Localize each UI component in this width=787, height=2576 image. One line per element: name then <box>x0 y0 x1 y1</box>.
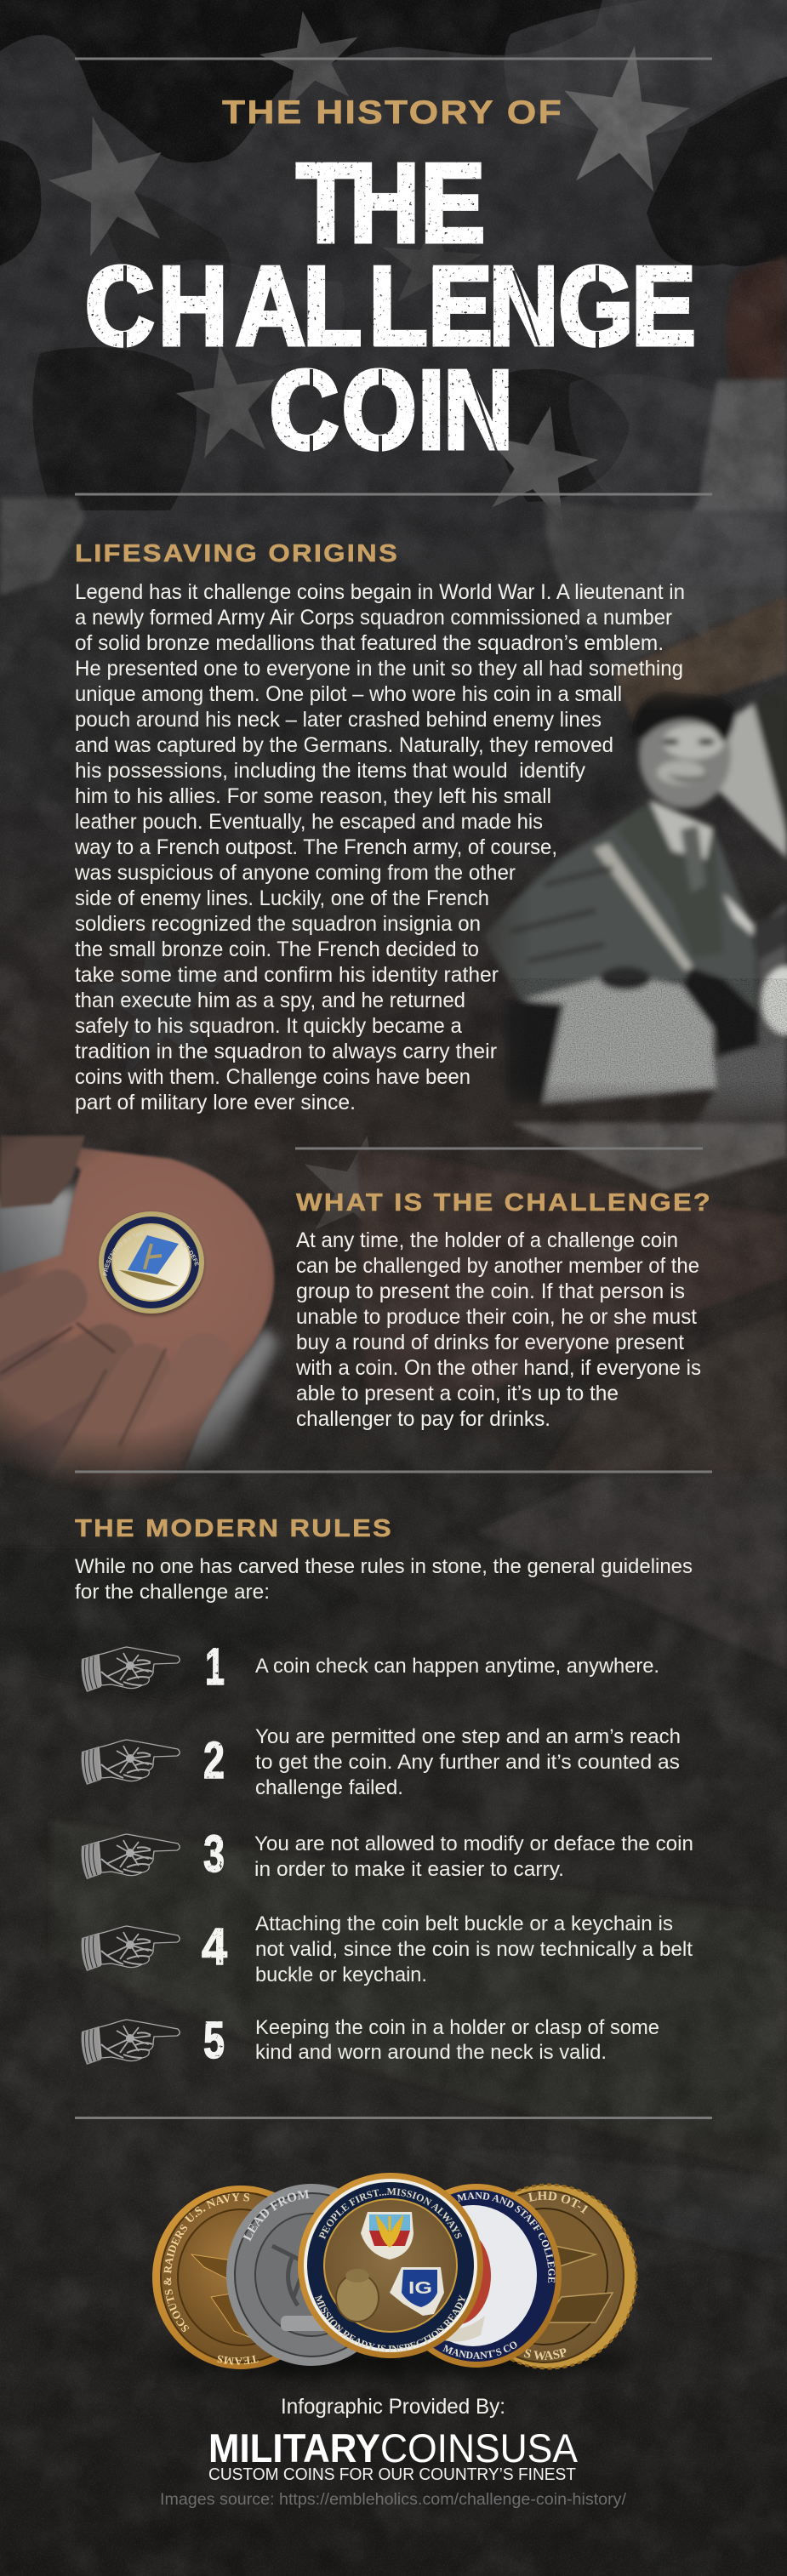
rule 2 text: challenge failed. <box>255 1776 403 1799</box>
text block: challenge explanation: buy a round of drinks for everyone present <box>296 1331 684 1354</box>
icon: pointing hand 5 <box>82 2020 180 2065</box>
number 2: 2 <box>203 1731 225 1789</box>
rule 5 text: Keeping the coin in a holder or clasp of some <box>255 2016 659 2039</box>
text block: challenge explanation: with a coin. On the other hand, if everyone is <box>295 1356 701 1380</box>
star shapes <box>49 11 707 1229</box>
coin group <box>152 2173 638 2380</box>
coin: people first mission always <box>298 2173 483 2358</box>
coin: command and staff college: MAND AND STAFF COLLEGE <box>456 2191 555 2283</box>
rule 3 text: in order to make it easier to carry. <box>254 1858 564 1881</box>
text block: origins story: a newly formed Army Air Corps squadron commissioned a number <box>75 606 672 630</box>
heading: lifesaving origins: LIFESAVING ORIGINS <box>75 540 399 567</box>
section: what is the challenge <box>295 1189 712 1431</box>
rule 5 text: kind and worn around the neck is valid. <box>255 2041 607 2064</box>
photo: soldier <box>483 681 787 1148</box>
divider: top <box>75 58 712 60</box>
rule 3 <box>82 1825 693 1883</box>
coin: navy scouts and raiders: TEAMS <box>217 2355 259 2365</box>
text block: origins story: unique among them. One pilot – who wore his coin in a small <box>75 682 622 706</box>
diagonal flag stripes <box>0 255 787 2263</box>
rule 5 <box>82 2011 659 2069</box>
icon: pointing hand 4 <box>82 1926 180 1971</box>
title: the challenge coin: CHALLENGE <box>85 244 696 369</box>
text block: origins story: side of enemy lines. Luckily, one of the French <box>75 886 489 910</box>
text block: challenge explanation: can be challenged by another member of the <box>296 1254 699 1278</box>
coin: navy scouts and raiders: SCOUTS & RAIDERS <box>163 2224 189 2332</box>
image source credit: Images source: https://embleholics.com/challenge-coin-history/ <box>160 2490 627 2509</box>
logo: military coins usa <box>208 2425 579 2484</box>
rule 2 text: You are permitted one step and an arm’s reach <box>255 1725 681 1748</box>
credit: infographic provided by: Infographic Provided By: <box>281 2395 505 2419</box>
rule 1 <box>82 1638 659 1695</box>
text block: origins story: than execute him as a spy, and he returned <box>75 989 465 1012</box>
text block: origins story: the small bronze coin. The French decided to <box>75 938 479 961</box>
text block: challenge explanation: able to present a coin, it’s up to the <box>296 1382 619 1405</box>
rule 1 text: A coin check can happen anytime, anywhere. <box>255 1655 659 1678</box>
coin in palm: PRESENTED BY THE SECRETARY OF DEFENSE <box>103 1230 199 1276</box>
text block: origins story: coins with them. Challenge coins have been <box>75 1065 470 1089</box>
text block: challenge explanation: group to present the coin. If that person is <box>296 1279 685 1303</box>
text block: origins story: and was captured by the Germans. Naturally, they removed <box>75 733 613 757</box>
rule 4 text: Attaching the coin belt buckle or a keychain is <box>255 1912 673 1935</box>
text block: origins story: way to a French outpost. The French army, of course, <box>74 835 557 859</box>
text block: rules intro: While no one has carved these rules in stone, the general guidelines <box>75 1555 693 1578</box>
icon: pointing hand 2 <box>82 1740 180 1785</box>
coin: USS Wasp bronze: LHD OT-1 <box>528 2191 588 2214</box>
text block: rules intro <box>75 1555 693 1604</box>
number 1: 1 <box>205 1638 225 1695</box>
coin: USS Wasp bronze: S WASP <box>524 2348 567 2360</box>
text block: origins story: was suspicious of anyone coming from the other <box>74 861 516 885</box>
coin: USS Wasp bronze <box>510 2183 638 2370</box>
text block: origins story: leather pouch. Eventually, he escaped and made his <box>75 810 543 834</box>
rule 3 text <box>254 1832 693 1881</box>
text block: challenge explanation <box>295 1228 701 1431</box>
logo: military coins usa: COINSUSA <box>380 2425 579 2471</box>
text block: origins story: soldiers recognized the squadron insignia on <box>75 912 481 936</box>
divider: above challenge section <box>295 1147 703 1150</box>
section: the modern rules <box>75 1515 693 2069</box>
text block: origins story: pouch around his neck – later crashed behind enemy lines <box>75 708 602 732</box>
shield: IG: IG <box>408 2279 432 2298</box>
number 3: 3 <box>203 1825 225 1883</box>
title: the challenge coin <box>87 162 694 452</box>
title: the challenge coin: COIN <box>269 348 513 473</box>
coin: command and staff college: MANDANT'S COIN <box>442 2341 517 2359</box>
rule 2 text <box>255 1725 681 1799</box>
coin: silver lead from the front <box>226 2184 396 2366</box>
coin: navy scouts and raiders <box>152 2186 281 2369</box>
rule 4 <box>82 1912 693 1986</box>
shield: air combat command <box>361 2212 413 2260</box>
text block: origins story: part of military lore ever since. <box>75 1091 356 1114</box>
text block: origins story: him to his allies. For some reason, they left his small <box>75 784 551 808</box>
divider: below title <box>75 493 712 495</box>
divider: above rules <box>75 1470 712 1473</box>
number 4: 4 <box>202 1918 227 1975</box>
heading: the modern rules: THE MODERN RULES <box>75 1515 393 1542</box>
section: lifesaving origins <box>74 540 685 1114</box>
photo: hand holding a challenge coin <box>0 1135 284 1487</box>
coin: command and staff college <box>427 2184 562 2368</box>
text block: origins story: his possessions, including the items that would identify <box>75 759 585 783</box>
text block: rules intro: for the challenge are: <box>75 1581 270 1604</box>
text block: origins story: safely to his squadron. It quickly became a <box>75 1014 462 1038</box>
rule 2 text: to get the coin. Any further and it’s counted as <box>255 1751 680 1774</box>
badge: bronze inspector <box>336 2269 379 2322</box>
icon: pointing hand 3 <box>82 1834 180 1879</box>
text block: challenge explanation: unable to produce their coin, he or she must <box>296 1305 697 1329</box>
text block: origins story: He presented one to everyone in the unit so they all had something <box>75 657 683 681</box>
title: the challenge coin: THE <box>296 141 485 266</box>
coin: people first mission always: PEOPLE FIRST...MISSION ALWAYS <box>318 2188 462 2239</box>
heading: what is the challenge: WHAT IS THE CHALLENGE? <box>296 1189 712 1217</box>
text block: origins story: take some time and confirm his identity rather <box>75 963 499 987</box>
rule 2 <box>82 1725 681 1799</box>
rule 4 text: not valid, since the coin is now technically a belt <box>255 1938 693 1961</box>
text block: origins story <box>74 580 685 1114</box>
shield: IG <box>390 2267 444 2316</box>
coin: people first mission always: MISSION READY IS INSPECTION READY <box>315 2294 466 2353</box>
text block: origins story: Legend has it challenge coins begain in World War I. A lieutenant in <box>75 580 685 604</box>
coin: navy scouts and raiders: U.S. NAVY S <box>184 2193 249 2222</box>
logo: military coins usa: MILITARY <box>208 2425 380 2471</box>
rule 4 text <box>255 1912 693 1986</box>
rule 4 text: buckle or keychain. <box>255 1963 427 1986</box>
text block: challenge explanation: At any time, the holder of a challenge coin <box>296 1228 678 1252</box>
title: the history of: THE HISTORY OF <box>222 94 563 131</box>
text block: origins story: of solid bronze medallions that featured the squadron’s emblem. <box>75 631 664 655</box>
number 5: 5 <box>203 2011 225 2069</box>
divider: above coins <box>75 2117 712 2119</box>
text block: origins story: tradition in the squadron to always carry their <box>75 1040 497 1063</box>
rule 5 text <box>255 2016 659 2064</box>
logo tagline: CUSTOM COINS FOR OUR COUNTRY’S FINEST <box>208 2465 576 2484</box>
coin: silver lead from the front: LEAD FROM <box>242 2190 310 2242</box>
icon: pointing hand 1 <box>82 1647 180 1692</box>
text block: challenge explanation: challenger to pay for drinks. <box>296 1407 550 1431</box>
coin in palm <box>97 1211 206 1317</box>
rule 3 text: You are not allowed to modify or deface the coin <box>254 1832 693 1855</box>
